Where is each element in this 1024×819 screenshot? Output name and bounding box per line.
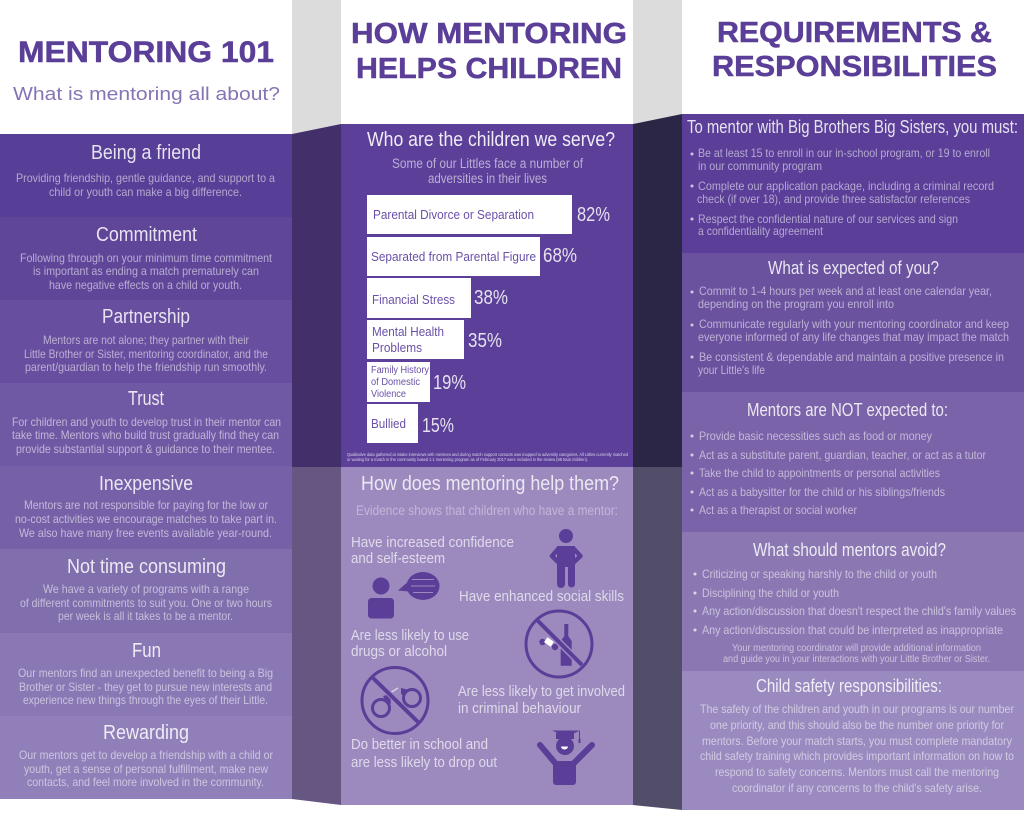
panel: inexpensive: We also have many free events available year-round.	[19, 526, 272, 540]
panel: fun: Our mentors find an unexpected benefit to being a Big	[18, 666, 273, 680]
panel: inexpensive	[0, 466, 292, 549]
panel: child safety responsibilities	[682, 671, 1024, 810]
bar chart: adversities: Mental Health	[372, 325, 444, 339]
footnote	[347, 452, 628, 462]
panel: mentors are not expected to: Act as a therapist or social worker	[699, 503, 857, 517]
icon: confident child	[552, 529, 580, 588]
panel: mentors are not expected to: Mentors are NOT expected to:	[747, 400, 948, 420]
panel: what should mentors avoid: and guide you in your interactions with your Little Brother or Sister.	[723, 653, 990, 665]
bar chart: adversities: Family History	[371, 365, 429, 376]
panel: commitment: Commitment	[96, 224, 197, 246]
panel: mentors are not expected to: Provide basic necessities such as food or money	[699, 429, 932, 443]
panel: what should mentors avoid: What should mentors avoid?	[753, 540, 946, 560]
panel: not time consuming	[0, 549, 292, 633]
bar chart: adversities: 38%	[474, 286, 508, 309]
bar chart: adversities: Separated from Parental Figure	[371, 250, 536, 264]
footnote: or waiting for a match in the community based 1:1 mentoring program as of February 2017 were included in the review (98 total children).	[347, 457, 588, 462]
title: mentoring 101: MENTORING 101	[18, 36, 274, 69]
fold strip: right	[633, 0, 682, 810]
bar chart: adversities: Parental Divorce or Separation	[373, 208, 534, 222]
panel: rewarding: contacts, and feel more involved in the community.	[27, 775, 264, 789]
bar chart: adversities: Financial Stress	[372, 293, 455, 307]
panel: commitment: have negative effects on a child or youth.	[49, 278, 242, 292]
panel: rewarding: Our mentors get to develop a friendship with a child or	[19, 748, 273, 762]
heading: Who are the children we serve?	[367, 129, 615, 151]
panel: partnership: Mentors are not alone; they partner with their	[43, 333, 249, 347]
intro text: Evidence shows that children who have a mentor:	[356, 503, 618, 518]
benefit: criminal behaviour: Are less likely to get involved	[458, 684, 625, 700]
panel: trust: take time. Mentors who build trust gradually find they can	[12, 428, 279, 442]
panel: rewarding	[0, 716, 292, 799]
icon: no drugs or alcohol	[526, 611, 592, 677]
subheading	[392, 156, 583, 186]
panel: not time consuming: Not time consuming	[67, 556, 226, 578]
panel: fun: Brother or Sister - they get to pursue new interests and	[19, 680, 272, 694]
panel: to mentor you must: Respect the confidential nature of our services and sign	[698, 212, 958, 226]
bar chart: adversities: 35%	[468, 329, 502, 352]
benefit: drugs or alcohol: drugs or alcohol	[351, 644, 447, 660]
bar chart: adversities: Problems	[372, 341, 422, 355]
panel: partnership: Little Brother or Sister, mentoring coordinator, and the	[24, 347, 268, 361]
panel: what should mentors avoid: Criticizing or speaking harshly to the child or youth	[702, 567, 937, 581]
panel: not time consuming: We have a variety of programs with a range	[43, 582, 249, 596]
panel: fun: experience new things through the eyes of their Little.	[23, 693, 268, 707]
bar chart: adversities: of Domestic	[371, 377, 420, 388]
panel: to mentor you must: check (if over 18), and provide three satisfactor references	[697, 192, 970, 206]
panel: child safety responsibilities: coordinator if any concerns to the child's safety arise.	[732, 781, 982, 795]
bar chart: adversities: 68%	[543, 244, 577, 267]
benefit: school: are less likely to drop out	[351, 755, 497, 771]
panel: fun: Fun	[132, 640, 161, 662]
title: requirements and responsibilities: REQUIREMENTS &	[717, 17, 992, 49]
bar chart: adversities: 15%	[422, 414, 454, 437]
panel: rewarding: youth, get a sense of personal fulfillment, make new	[24, 762, 268, 776]
panel: mentors are not expected to: Act as a substitute parent, guardian, teacher, or act as a tutor	[699, 448, 986, 462]
panel: mentors are not expected to: Take the child to appointments or personal activities	[699, 466, 940, 480]
panel: what should mentors avoid	[682, 532, 1024, 671]
bar chart: adversities: Bullied	[371, 417, 406, 431]
icon: no handcuffs	[362, 668, 428, 734]
panel: mentors are not expected to: Act as a babysitter for the child or his siblings/friends	[699, 485, 945, 499]
heading: How does mentoring help them?	[361, 473, 619, 495]
benefit: social skills: Have enhanced social skills	[459, 589, 624, 605]
bar chart: adversities: 19%	[433, 371, 466, 394]
panel: to mentor you must: Be at least 15 to enroll in our in-school program, or 19 to enroll	[698, 146, 990, 160]
bar chart: adversities: Violence	[371, 389, 406, 400]
benefit: confidence: Have increased confidence	[351, 535, 514, 551]
panel: being a friend: child or youth can make a big difference.	[49, 185, 242, 199]
panel: inexpensive: Mentors are not responsible for paying for the low or	[24, 498, 268, 512]
title: how mentoring helps children: HOW MENTORING	[351, 18, 627, 50]
panel: partnership: Partnership	[102, 306, 190, 328]
panel: partnership: parent/guardian to help the friendship run smoothly.	[25, 360, 267, 374]
panel: being a friend: Being a friend	[91, 142, 201, 164]
panel: what is expected of you	[682, 253, 1024, 392]
benefit: school	[351, 737, 497, 771]
icon: person speaking	[368, 572, 440, 618]
panel: what is expected of you: your Little's life	[698, 363, 765, 377]
benefit: confidence	[351, 535, 514, 567]
panel: what is expected of you: depending on the program you enroll into	[698, 297, 894, 311]
panel: to mentor you must: a confidentiality agreement	[698, 224, 824, 238]
panel: trust: Trust	[128, 388, 164, 410]
panel: to mentor you must: in our community program	[698, 159, 822, 173]
panel: fun	[0, 633, 292, 716]
panel: not time consuming: of different commitments to suit you. One or two hours	[20, 596, 272, 610]
footnote: Qualitative data gathered at intake interviews with mentees and during match support contacts was mapped to adversity categories. All Littles currently matched	[347, 452, 628, 457]
panel: trust: For children and youth to develop trust in their mentor can	[12, 415, 281, 429]
panel: what is expected of you: Commit to 1-4 hours per week and at least one calendar year,	[699, 284, 992, 298]
subheading: Some of our Littles face a number of	[392, 156, 583, 171]
panel: partnership	[0, 300, 292, 383]
panel: child safety responsibilities: Child safety responsibilities:	[756, 676, 942, 696]
bar chart: adversities	[367, 195, 610, 443]
panel: not time consuming: per week is all it takes to be a mentor.	[58, 609, 233, 623]
panel: to mentor you must	[682, 114, 1024, 253]
icon: graduate	[540, 730, 592, 785]
fold strip: left	[292, 0, 341, 805]
panel: commitment: Following through on your minimum time commitment	[20, 251, 273, 265]
title: mentoring 101	[13, 36, 280, 104]
title: requirements and responsibilities: RESPONSIBILITIES	[712, 51, 997, 83]
panel: commitment	[0, 217, 292, 300]
title: mentoring 101: What is mentoring all about?	[13, 84, 280, 104]
bar chart: adversities: 82%	[577, 203, 610, 226]
benefit: confidence: and self-esteem	[351, 551, 445, 567]
subheading: adversities in their lives	[428, 171, 547, 186]
benefit: drugs or alcohol	[351, 628, 469, 660]
panel: rewarding: Rewarding	[103, 722, 189, 744]
panel: to mentor you must: Complete our application package, including a criminal record	[698, 179, 994, 193]
panel: what should mentors avoid: Your mentoring coordinator will provide additional information	[732, 642, 981, 654]
panel: how does mentoring help them	[341, 467, 633, 805]
benefit: school: Do better in school and	[351, 737, 488, 753]
panel: who are the children we serve	[341, 124, 633, 467]
panel: trust: provide substantial support & guidance to their mentee.	[16, 442, 275, 456]
panel: trust	[0, 383, 292, 466]
panel: commitment: is important as ending a match prematurely can	[33, 264, 259, 278]
benefit: criminal behaviour: in criminal behaviour	[458, 701, 581, 717]
panel: being a friend: Providing friendship, gentle guidance, and support to a	[16, 171, 275, 185]
panel: being a friend	[0, 134, 292, 217]
panel: what is expected of you: What is expected of you?	[768, 258, 939, 278]
panel: what should mentors avoid: Disciplining the child or youth	[702, 586, 839, 600]
benefit: criminal behaviour	[458, 684, 625, 717]
panel: inexpensive: no-cost activities we encourage matches to take part in.	[15, 512, 277, 526]
title: how mentoring helps children: HELPS CHILDREN	[356, 53, 622, 85]
panel: inexpensive: Inexpensive	[99, 473, 193, 495]
panel: mentors are not expected to	[682, 392, 1024, 532]
title: requirements and responsibilities	[712, 17, 997, 83]
benefit: drugs or alcohol: Are less likely to use	[351, 628, 469, 644]
title: how mentoring helps children	[351, 18, 627, 85]
